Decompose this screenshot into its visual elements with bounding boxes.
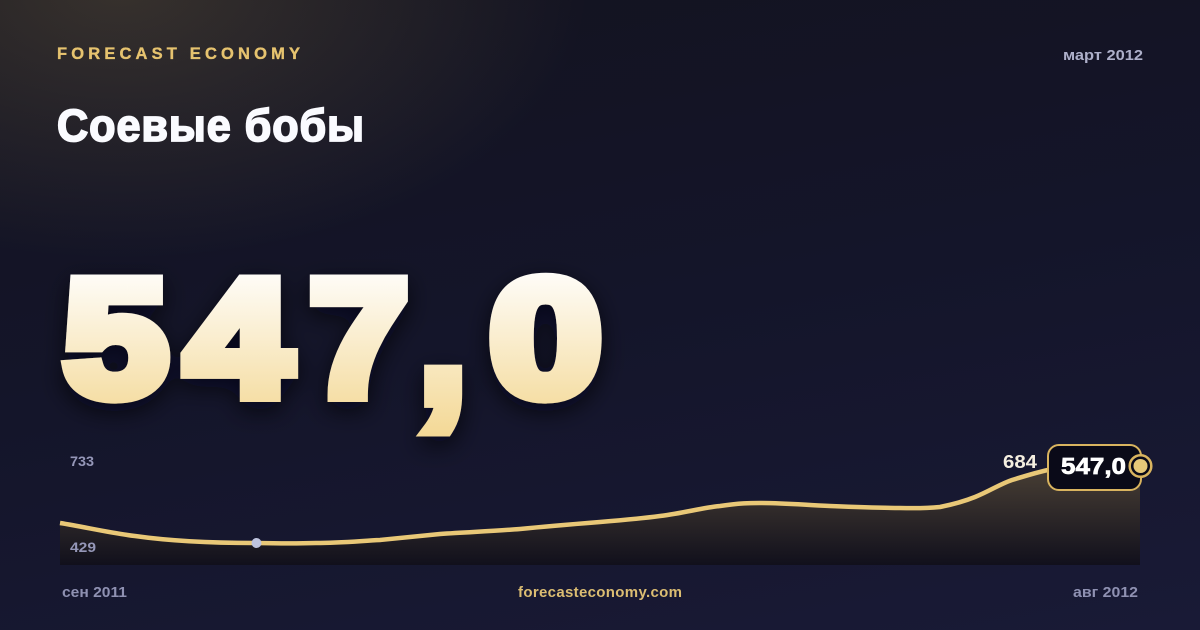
area fill [60, 466, 1140, 565]
axis min label: 429 [70, 539, 96, 555]
big value: 7 [310, 247, 408, 431]
tag value: 547,0 [1061, 453, 1126, 479]
website: forecasteconomy.com [518, 584, 682, 601]
start date: сен 2011 [62, 584, 127, 601]
price line [60, 466, 1140, 543]
end date: авг 2012 [1073, 584, 1138, 601]
date label: март 2012 [1063, 47, 1143, 64]
big value: 0 [490, 246, 601, 430]
title: Соевые бобы [57, 100, 365, 151]
chart: area and line [60, 466, 1140, 565]
big value: , [420, 234, 466, 440]
big value [64, 234, 601, 440]
current value tag [1048, 445, 1141, 490]
axis max label: 733 [70, 453, 94, 469]
big value: 5 [64, 247, 168, 431]
peak label: 684 [1003, 452, 1037, 472]
current point marker [1130, 455, 1151, 477]
big value: 4 [186, 246, 291, 430]
brand label: FORECAST ECONOMY [57, 45, 300, 63]
minimum marker [252, 538, 262, 548]
